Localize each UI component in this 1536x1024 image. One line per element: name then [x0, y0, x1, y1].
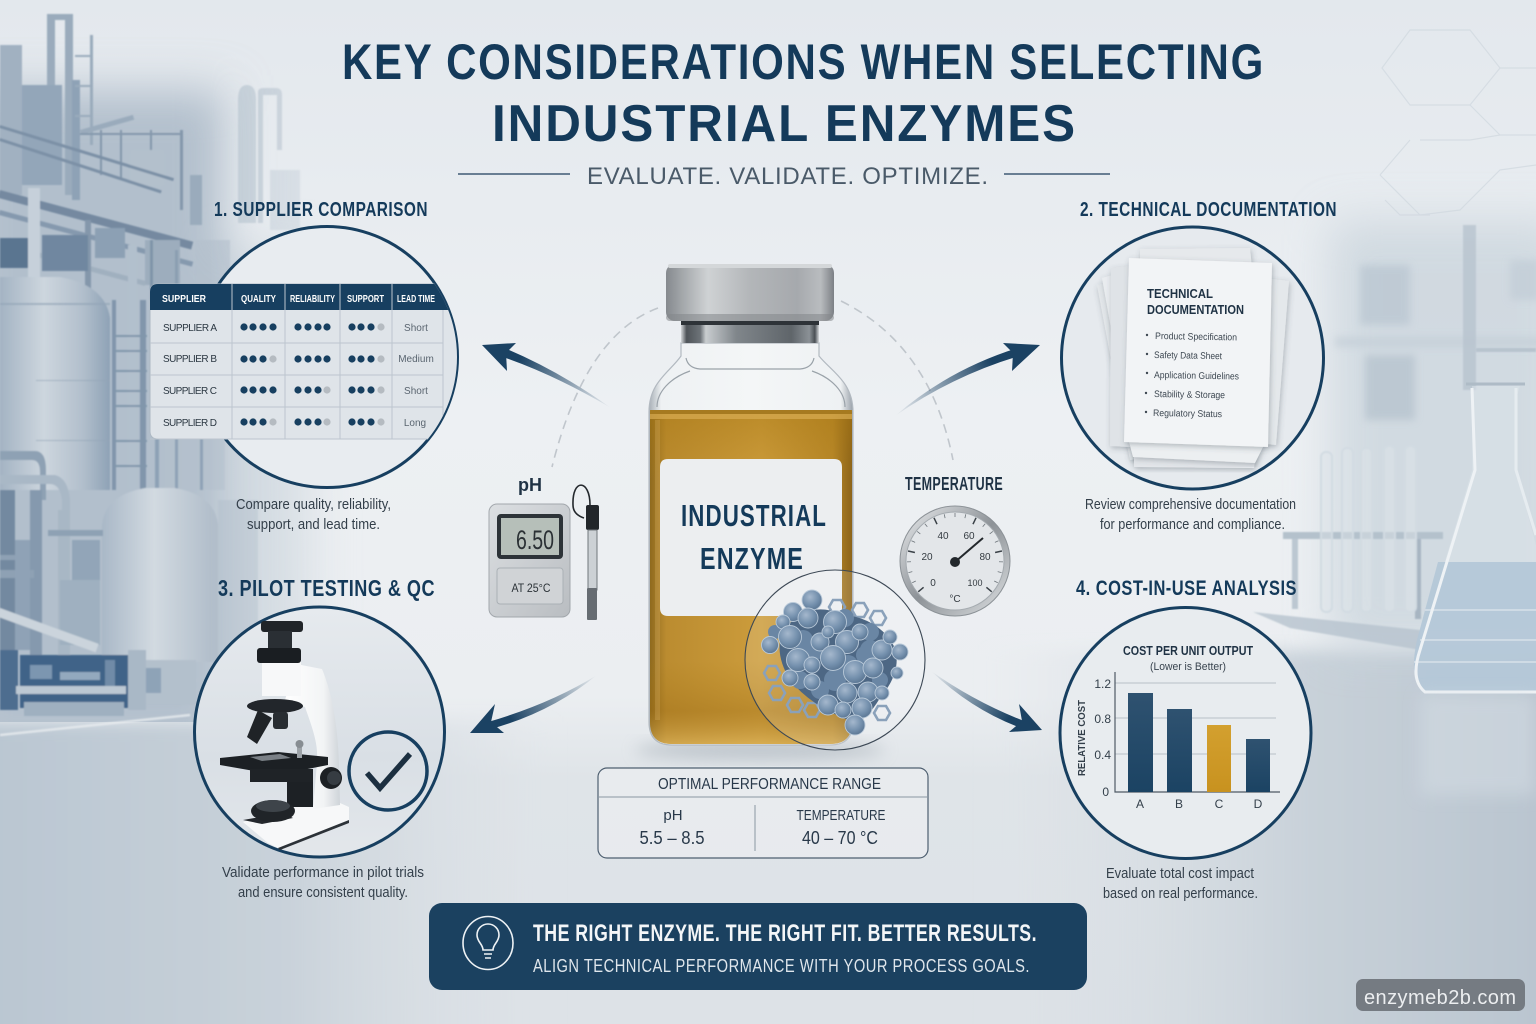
- vial cap: [666, 264, 834, 321]
- caption: cost analysis: Evaluate total cost impact: [1106, 866, 1254, 882]
- panel: cost in use analysis: [1060, 577, 1311, 902]
- plant tank small: [102, 488, 218, 662]
- magnifier with enzyme molecule: [745, 570, 925, 750]
- optimal performance range box: pH: [663, 807, 683, 824]
- main document page: Safety Data Sheet: [1154, 350, 1222, 362]
- arrow: to supplier comparison: [482, 343, 611, 408]
- optimal performance range box: OPTIMAL PERFORMANCE RANGE: [658, 776, 881, 793]
- bar chart: D: [1254, 797, 1263, 811]
- icon: lightbulb: [463, 916, 513, 970]
- checkmark badge: [349, 732, 427, 810]
- vial glass lip and shoulder highlights: [657, 358, 845, 407]
- temperature gauge: 20: [921, 552, 933, 563]
- tagline: EVALUATE. VALIDATE. OPTIMIZE.: [587, 163, 988, 190]
- caption: pilot testing: and ensure consistent quality.: [238, 885, 408, 901]
- optimal performance range box: 40 – 70 °C: [802, 828, 878, 848]
- heading: cost analysis: 4. COST-IN-USE ANALYSIS: [1076, 577, 1297, 600]
- optimal performance range box: [598, 768, 928, 858]
- document stack: [1097, 248, 1289, 468]
- temperature gauge: °C: [949, 594, 961, 605]
- supplier table: Short: [404, 323, 428, 334]
- caption: cost analysis: [1103, 866, 1258, 902]
- main document page: Application Guidelines: [1154, 370, 1239, 382]
- vial collar: [681, 320, 819, 343]
- bottom banner: THE RIGHT ENZYME. THE RIGHT FIT. BETTER RESULTS.: [533, 920, 1037, 947]
- main document page: Stability & Storage: [1154, 389, 1225, 401]
- vial shadow: [635, 740, 885, 760]
- supplier table: SUPPLIER: [162, 294, 207, 305]
- watermark: [1356, 979, 1525, 1011]
- bar chart: RELATIVE COST: [1077, 700, 1088, 776]
- vial label: [660, 459, 842, 616]
- temperature gauge: 80: [979, 552, 991, 563]
- optimal performance range box: TEMPERATURE: [796, 807, 886, 824]
- bar chart: 0.4: [1094, 748, 1111, 762]
- bar chart: 1.2: [1094, 677, 1111, 691]
- heading: pilot testing: 3. PILOT TESTING & QC: [218, 575, 435, 601]
- heading: technical documentation: 2. TECHNICAL DOCUMENTATION: [1080, 199, 1337, 221]
- temperature gauge: TEMPERATURE: [905, 474, 1003, 494]
- bar chart: A: [1136, 797, 1144, 811]
- circle frame: [1060, 608, 1311, 858]
- vial label: ENZYME: [700, 541, 804, 576]
- temperature gauge: [900, 474, 1010, 616]
- main document page: TECHNICAL: [1147, 286, 1213, 301]
- supplier table: SUPPLIER D: [163, 418, 217, 429]
- panel: pilot testing and QC: [194, 575, 444, 901]
- bar chart: [1077, 643, 1280, 811]
- optimal performance range box: 5.5 – 8.5: [640, 828, 704, 848]
- supplier table: Long: [404, 418, 426, 429]
- arrow: to pilot testing: [470, 675, 597, 733]
- bar chart: (Lower is Better): [1150, 661, 1226, 673]
- caption: technical documentation: for performance and compliance.: [1100, 517, 1285, 533]
- arrow: to cost analysis: [931, 671, 1042, 732]
- background floor right: [980, 650, 1536, 1024]
- heading: supplier comparison: 1. SUPPLIER COMPARISON: [214, 199, 428, 221]
- circle frame: [1062, 227, 1324, 489]
- title: INDUSTRIAL ENZYMES: [492, 95, 1077, 153]
- vial label: INDUSTRIAL: [681, 498, 827, 533]
- lab flask: [1414, 384, 1536, 692]
- caption: pilot testing: Validate performance in pilot trials: [222, 865, 424, 881]
- panel: supplier comparison: [150, 199, 470, 533]
- main document page: Regulatory Status: [1153, 408, 1222, 420]
- supplier table: QUALITY: [241, 294, 276, 305]
- supplier table: [150, 284, 470, 439]
- bottom banner: ALIGN TECHNICAL PERFORMANCE WITH YOUR PROCESS GOALS.: [533, 956, 1030, 976]
- temperature gauge: 100: [967, 578, 983, 588]
- caption: supplier comparison: Compare quality, reliability,: [236, 497, 391, 513]
- main document page: Product Specification: [1155, 331, 1237, 343]
- panel: technical documentation: [1062, 199, 1337, 533]
- pH meter: [489, 475, 599, 620]
- bar chart: C: [1215, 797, 1224, 811]
- circle frame: [194, 607, 444, 857]
- supplier table: SUPPLIER A: [163, 323, 217, 334]
- supplier table: LEAD TIME: [397, 294, 435, 305]
- temperature gauge: 40: [937, 531, 949, 542]
- caption: supplier comparison: support, and lead time.: [247, 517, 380, 533]
- background: laboratory: [1253, 30, 1536, 795]
- caption: technical documentation: [1085, 497, 1296, 533]
- watermark: enzymeb2b.com: [1364, 987, 1516, 1009]
- microscope: [220, 621, 349, 850]
- pH meter: pH: [518, 475, 542, 495]
- caption: pilot testing: [222, 865, 424, 901]
- bar chart: B: [1175, 797, 1183, 811]
- temperature gauge: 0: [930, 578, 936, 589]
- bottom banner: [429, 903, 1087, 990]
- floor highlight line: [0, 715, 190, 735]
- arrow: to technical documentation: [895, 343, 1040, 416]
- caption: technical documentation: Review comprehensive documentation: [1085, 497, 1296, 513]
- supplier table: Short: [404, 386, 428, 397]
- bar chart: COST PER UNIT OUTPUT: [1123, 643, 1253, 658]
- circle frame: [196, 226, 458, 488]
- background floor left: [0, 722, 560, 1024]
- bar chart: 0: [1102, 785, 1109, 799]
- supplier table: SUPPLIER C: [163, 386, 217, 397]
- lab test tube rack: [1253, 446, 1443, 650]
- main document page: DOCUMENTATION: [1147, 302, 1244, 317]
- vial liquid: [650, 410, 853, 744]
- supplier table: SUPPORT: [347, 294, 384, 305]
- pH meter: AT 25°C: [512, 581, 551, 595]
- caption: cost analysis: based on real performance.: [1103, 886, 1258, 902]
- pH meter: 6.50: [516, 525, 554, 555]
- vial glass: [649, 343, 853, 745]
- background: industrial plant: [0, 14, 315, 750]
- supplier table: Medium: [398, 354, 434, 365]
- supplier table: RELIABILITY: [290, 294, 335, 305]
- supplier table: SUPPLIER B: [163, 354, 217, 365]
- title: [342, 34, 1265, 153]
- title: KEY CONSIDERATIONS WHEN SELECTING: [342, 34, 1265, 90]
- caption: supplier comparison: [236, 497, 391, 533]
- dashed arc left: [552, 308, 658, 467]
- enzyme vial: [635, 264, 925, 760]
- bar chart: 0.8: [1094, 712, 1111, 726]
- flask reflection: [1420, 695, 1536, 795]
- plant tank large: [0, 277, 110, 490]
- dashed arc right: [841, 301, 953, 460]
- temperature gauge: 60: [963, 531, 975, 542]
- main document page: [1124, 258, 1272, 447]
